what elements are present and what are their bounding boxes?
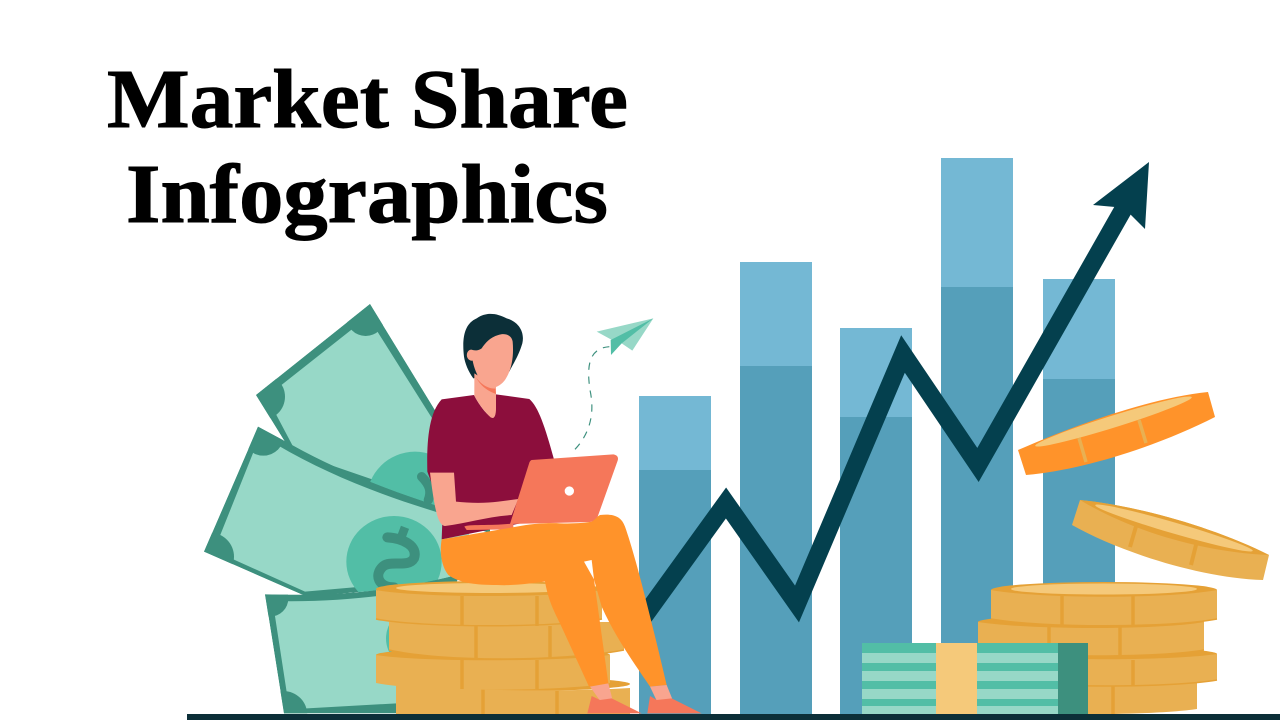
banknote: front — [265, 576, 454, 714]
title: Infographics — [126, 148, 608, 241]
icon: falling gold coin — [1072, 500, 1269, 580]
paper plane — [597, 318, 653, 355]
icon: banknotes fan — [186, 297, 490, 720]
coin 1 — [376, 581, 602, 626]
title — [107, 53, 628, 241]
feet — [587, 683, 702, 713]
coin 3 — [376, 648, 610, 690]
icon: right coin stack — [971, 582, 1217, 714]
neck — [474, 373, 496, 418]
coin 2 — [978, 615, 1204, 656]
laptop — [464, 454, 618, 530]
coin 1 — [991, 582, 1217, 626]
pants — [441, 515, 667, 687]
coin 3 — [991, 647, 1217, 686]
icon: paper plane with dashed trail — [575, 318, 653, 449]
shirt — [427, 394, 554, 539]
arm — [430, 473, 518, 526]
coin 4 — [971, 678, 1197, 714]
icon: left coin stack — [376, 581, 630, 714]
coin 2 — [389, 622, 624, 659]
person with laptop — [427, 314, 702, 713]
icon: falling orange coin — [1018, 391, 1215, 475]
ground line — [187, 714, 1280, 720]
arrow: rising trend line — [640, 162, 1149, 622]
hair — [463, 314, 523, 378]
banknote: middle — [204, 426, 469, 595]
bar chart — [639, 158, 1115, 714]
face — [467, 334, 513, 388]
banknote: back — [256, 304, 490, 532]
dashed trail — [575, 347, 609, 449]
icon: banknote bundle — [862, 643, 1088, 714]
title: Market Share — [107, 53, 628, 146]
coin 4 — [396, 677, 630, 714]
